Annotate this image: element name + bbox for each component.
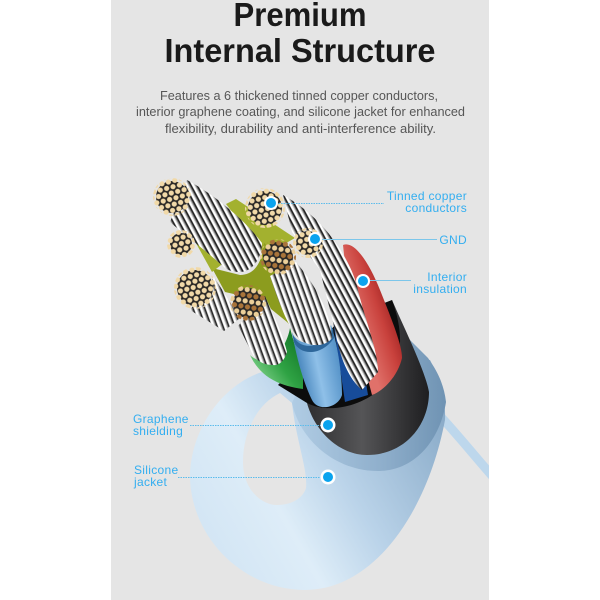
background panel bbox=[111, 0, 489, 600]
conductor end: small right bbox=[293, 228, 323, 258]
blue insulated wire bbox=[292, 325, 342, 407]
callout: GND bbox=[308, 232, 467, 247]
conductor end: top left bbox=[153, 178, 191, 216]
callout: interior insulation bbox=[356, 270, 467, 296]
olive insulation core bbox=[214, 243, 290, 324]
black core opening bbox=[278, 300, 400, 408]
conductor end: front bbox=[230, 285, 266, 321]
callout: interior insulation: Interior bbox=[427, 270, 467, 284]
lower left conductor wire bbox=[190, 277, 240, 331]
title bbox=[164, 0, 436, 69]
description text: Features a 6 thickened tinned copper conductors, bbox=[160, 88, 438, 103]
description text bbox=[136, 88, 465, 136]
description text: flexibility, durability and anti-interference ability. bbox=[165, 121, 436, 136]
conductor end: center bbox=[260, 239, 296, 275]
front conductor wire bbox=[238, 296, 287, 365]
callout: graphene shielding bbox=[133, 412, 336, 438]
callout: silicone jacket: jacket bbox=[133, 475, 168, 489]
callout: graphene shielding: Graphene bbox=[133, 412, 189, 426]
small wire olive strands bbox=[196, 244, 222, 272]
center conductor wire bbox=[270, 262, 332, 345]
callout: tinned copper conductors: Tinned copper bbox=[387, 189, 467, 203]
dark blue strands bbox=[333, 322, 368, 402]
conductor end: small left bbox=[167, 230, 195, 258]
top left conductor wire bbox=[170, 180, 262, 272]
description text: interior graphene coating, and silicone jacket for enhanced bbox=[136, 104, 465, 119]
olive insulation upper bbox=[226, 199, 295, 255]
thin cable tail bbox=[442, 418, 494, 478]
callout: silicone jacket bbox=[133, 463, 336, 489]
silicone jacket bbox=[190, 360, 445, 590]
green insulated wire bbox=[250, 328, 303, 389]
top right conductor wire bbox=[283, 195, 378, 390]
cable illustration bbox=[153, 178, 494, 590]
conductor end: lower left bbox=[174, 267, 216, 309]
callout: graphene shielding: shielding bbox=[133, 424, 183, 438]
callout: tinned copper conductors: conductors bbox=[405, 201, 467, 215]
red insulated wire bbox=[343, 244, 402, 395]
callout: tinned copper conductors bbox=[264, 189, 467, 215]
callout: GND: GND bbox=[439, 233, 467, 247]
title: Internal Structure bbox=[164, 32, 436, 69]
callout: interior insulation: insulation bbox=[413, 282, 467, 296]
black graphene shield bbox=[307, 300, 429, 455]
conductor end: top right bbox=[245, 188, 285, 228]
callout: silicone jacket: Silicone bbox=[134, 463, 178, 477]
jacket collar bbox=[292, 330, 446, 471]
